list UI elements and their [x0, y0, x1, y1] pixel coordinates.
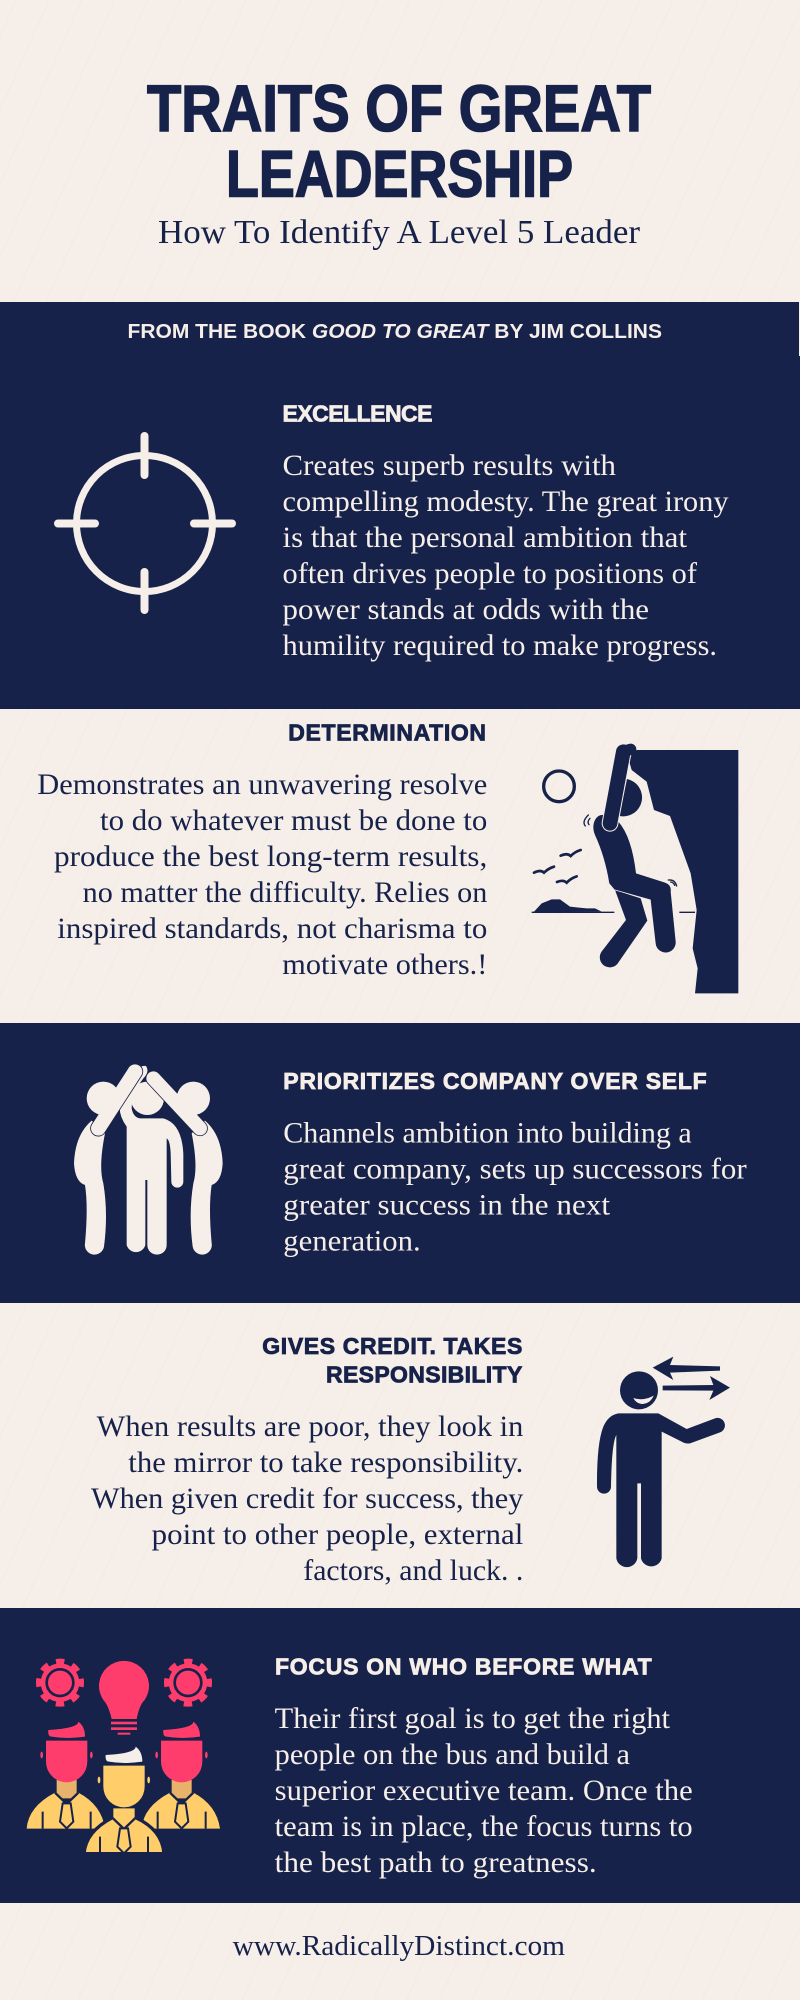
body text: determination: to do whatever must be done to: [100, 804, 487, 837]
body text: determination: [37, 768, 487, 981]
heading: gives credit, takes responsibility: [262, 1333, 522, 1388]
icon: light bulb: [99, 1661, 149, 1735]
body text: excellence: power stands at odds with the: [282, 593, 649, 626]
title line 1: TRAITS OF GREAT: [147, 71, 651, 145]
figure: center man: [84, 1747, 164, 1854]
heading: focus on who before what: FOCUS ON WHO BEFORE WHAT: [275, 1654, 652, 1680]
body text: determination: motivate others.!: [282, 948, 487, 981]
icon: team of three with gears and light bulb: [27, 1661, 220, 1854]
body text: focus on who before what: [275, 1702, 693, 1879]
body text: determination: no matter the difficulty. Relies on: [83, 876, 487, 909]
body text: focus on who before what: the best path to greatness.: [275, 1846, 597, 1879]
body text: determination: produce the best long-term results,: [54, 840, 487, 873]
icon: climber on a cliff: [532, 749, 738, 993]
panel: prioritizes company over self: [0, 1023, 800, 1303]
body text: excellence: compelling modesty. The great irony: [282, 485, 728, 518]
figure: right man: [142, 1722, 220, 1829]
icon: three people reaching up: [74, 1066, 223, 1255]
body text: prioritizes company over self: Channels ambition into building a: [283, 1116, 692, 1149]
panel: determination: [37, 720, 738, 993]
heading: gives credit, takes responsibility: GIVES CREDIT. TAKES: [262, 1333, 522, 1359]
body text: determination: inspired standards, not charisma to: [57, 912, 487, 945]
panel: gives credit, takes responsibility: [91, 1333, 730, 1587]
heading: determination: DETERMINATION: [288, 720, 486, 746]
body text: gives credit, takes responsibility: point to other people, external: [152, 1518, 523, 1551]
body text: prioritizes company over self: [283, 1116, 747, 1257]
body text: excellence: is that the personal ambition that: [282, 521, 688, 554]
heading: excellence: EXCELLENCE: [282, 400, 432, 426]
body text: focus on who before what: superior executive team. Once the: [275, 1774, 693, 1807]
heading: gives credit, takes responsibility: RESPONSIBILITY: [326, 1362, 522, 1388]
body text: excellence: humility required to make progress.: [282, 629, 717, 662]
body text: focus on who before what: Their first goal is to get the right: [275, 1702, 671, 1735]
body text: focus on who before what: people on the bus and build a: [275, 1738, 630, 1771]
heading: prioritizes company over self: PRIORITIZES COMPANY OVER SELF: [283, 1068, 707, 1094]
body text: excellence: often drives people to positions of: [282, 557, 697, 590]
body text: prioritizes company over self: greater success in the next: [283, 1188, 611, 1221]
body text: gives credit, takes responsibility: When given credit for success, they: [91, 1482, 523, 1515]
body text: excellence: Creates superb results with: [282, 449, 616, 482]
title line 2: LEADERSHIP: [226, 136, 573, 210]
header: title and subtitle: [147, 71, 651, 251]
panel: excellence: [0, 302, 800, 709]
body text: focus on who before what: team is in place, the focus turns to: [275, 1810, 693, 1843]
body text: gives credit, takes responsibility: [91, 1410, 523, 1587]
body text: determination: Demonstrates an unwavering resolve: [37, 768, 487, 801]
body text: prioritizes company over self: great company, sets up successors for: [283, 1152, 747, 1185]
body text: gives credit, takes responsibility: the mirror to take responsibility.: [128, 1446, 523, 1479]
panel: focus on who before what: [0, 1608, 800, 1903]
icon: person with opposing arrows: [597, 1357, 730, 1567]
footer: website: www.RadicallyDistinct.com: [233, 1931, 565, 1962]
body text: gives credit, takes responsibility: When results are poor, they look in: [97, 1410, 523, 1443]
subtitle: How To Identify A Level 5 Leader: [158, 214, 641, 251]
figure: left man: [27, 1722, 105, 1829]
body text: prioritizes company over self: generation.: [283, 1224, 421, 1257]
icon: left gear: [39, 1661, 81, 1704]
body text: gives credit, takes responsibility: factors, and luck. .: [303, 1554, 523, 1587]
icon: crosshair target: [58, 436, 232, 610]
icon: right gear: [167, 1661, 209, 1704]
body text: excellence: [282, 449, 728, 662]
source line: FROM THE BOOK GOOD TO GREAT BY JIM COLLINS: [128, 320, 662, 343]
